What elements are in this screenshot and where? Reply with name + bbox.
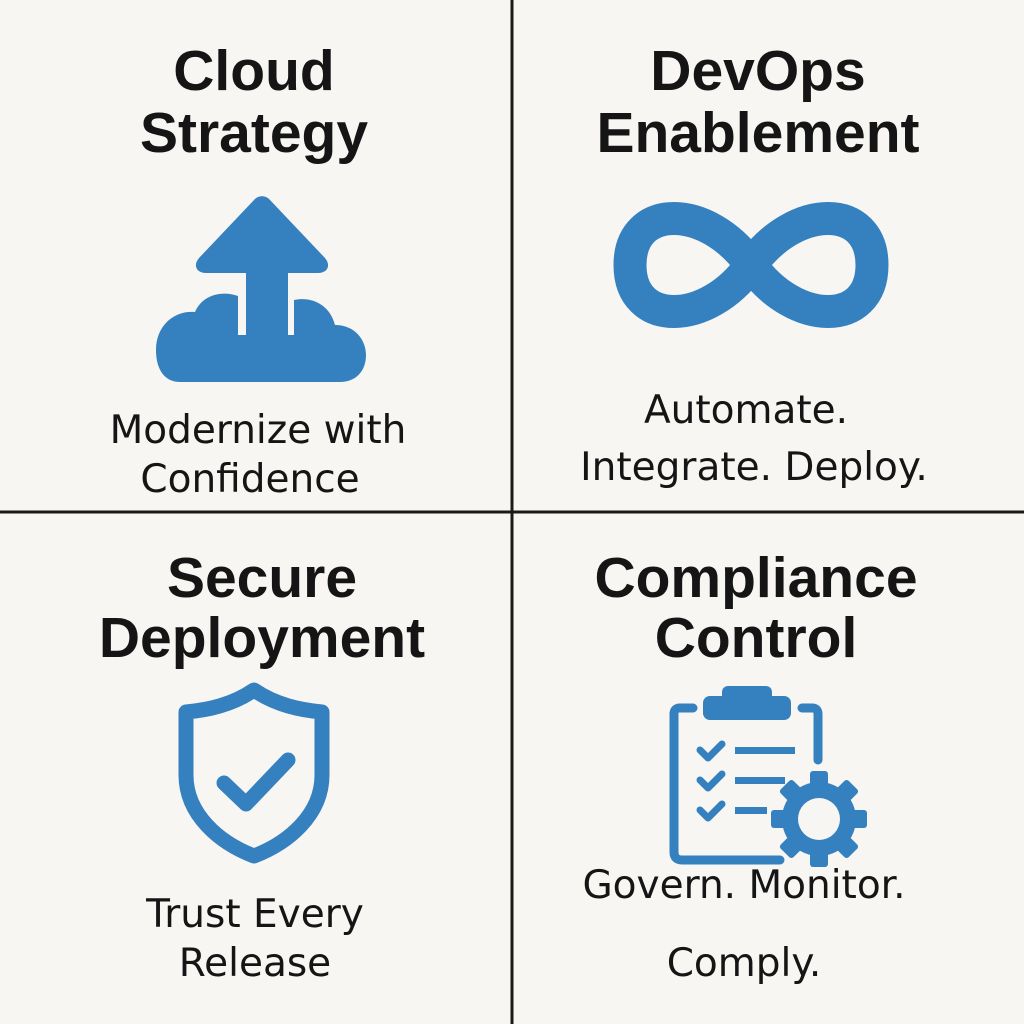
heading: cloud strategy: Strategy: [140, 101, 368, 165]
subtitle: Modernize with: [110, 408, 406, 453]
heading: devops: DevOps: [650, 39, 866, 103]
subtitle: Release: [179, 941, 331, 986]
subtitle: Trust Every: [146, 892, 364, 937]
panel: compliance control: [582, 546, 918, 986]
heading: cloud strategy: Cloud: [173, 39, 335, 103]
panel: cloud strategy: [110, 39, 406, 502]
heading: Control: [655, 606, 857, 670]
icon: cloud upload: [156, 196, 366, 382]
subtitle: Integrate. Deploy.: [580, 445, 928, 490]
subtitle: Comply.: [667, 941, 821, 986]
subtitle: Confidence: [140, 457, 360, 502]
heading: Deployment: [99, 606, 425, 670]
heading: devops: Enablement: [596, 101, 920, 165]
heading: Compliance: [594, 546, 918, 610]
panel: devops enablement: [580, 39, 928, 490]
panel: secure deployment: [99, 546, 425, 986]
icon: shield: [186, 690, 322, 856]
icon: clipboard with gear: [674, 686, 887, 887]
subtitle: Govern. Monitor.: [582, 863, 906, 908]
heading: Secure: [167, 546, 357, 610]
subtitle: Automate.: [644, 388, 848, 433]
icon: infinity: [630, 218, 872, 312]
